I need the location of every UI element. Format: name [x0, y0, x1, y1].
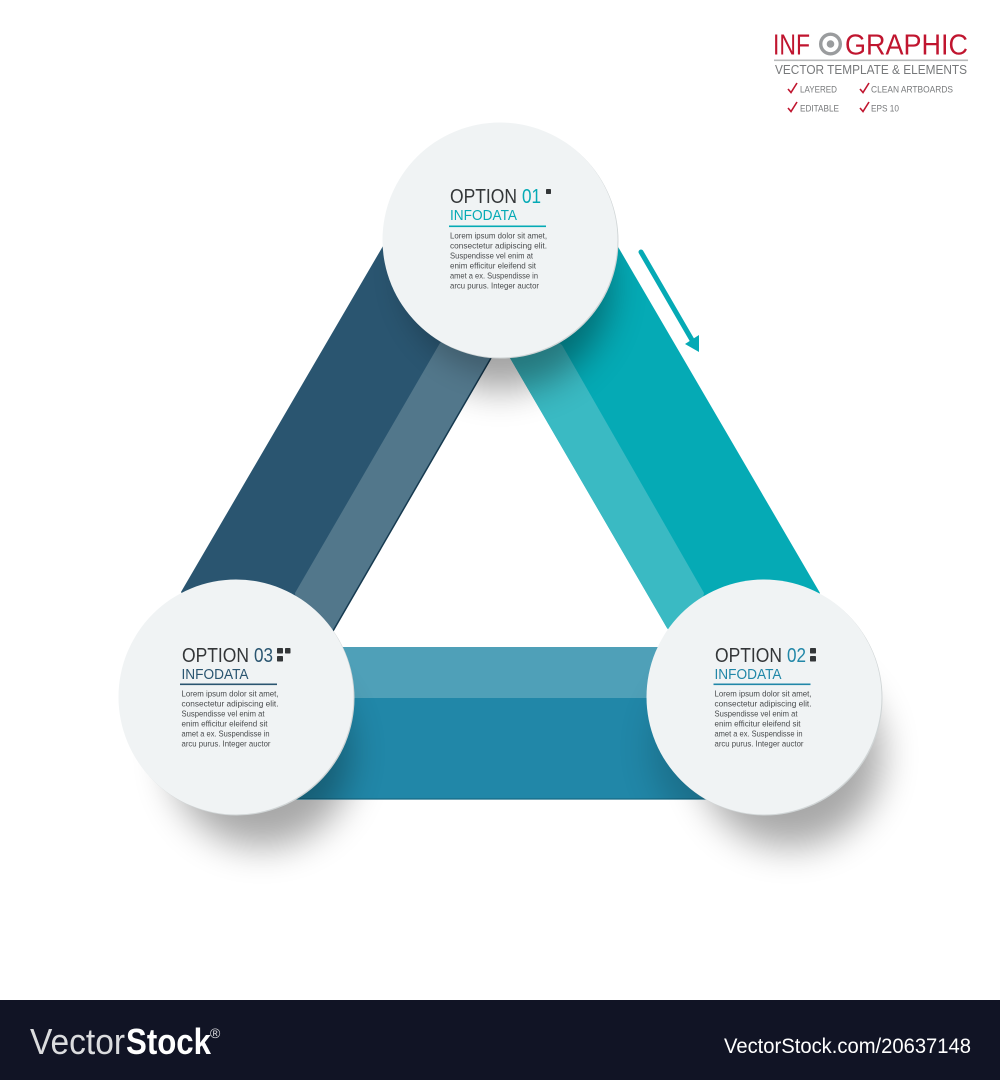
logo tagline: VECTOR TEMPLATE & ELEMENTS [775, 63, 967, 77]
underline 03 [180, 684, 277, 685]
body text 02 [714, 688, 812, 748]
band: left dark [181, 246, 492, 632]
body text 02: arcu purus. Integer auctor [714, 738, 804, 748]
footer brand: ® [210, 1025, 221, 1041]
feature list: EDITABLE [800, 104, 839, 114]
icon: three squares [277, 648, 290, 662]
panel: option 02 [646, 580, 882, 816]
logo wordmark: GRAPHIC [845, 30, 968, 62]
body text 01 [450, 230, 547, 290]
body text 01: enim efficitur eleifend sit [450, 260, 537, 270]
body text 01: amet a ex. Suspendisse in [450, 270, 538, 280]
band: right teal [510, 247, 820, 630]
footer url: VectorStock.com/20637148 [724, 1035, 971, 1058]
body text 02: enim efficitur eleifend sit [714, 718, 801, 728]
body text 03: Lorem ipsum dolor sit amet, [182, 688, 278, 698]
body text 02: Suspendisse vel enim at [714, 708, 798, 718]
footer brand [30, 1021, 221, 1062]
body text 02: amet a ex. Suspendisse in [714, 728, 803, 738]
icon: two squares [810, 648, 816, 662]
body text 01: consectetur adipiscing elit. [450, 240, 547, 250]
body text 01: arcu purus. Integer auctor [450, 280, 539, 290]
logo wordmark: INF [773, 30, 810, 62]
subheading: infodata 02: INFODATA [714, 666, 782, 683]
body text 03 [182, 688, 278, 748]
logo wordmark [773, 30, 968, 62]
footer bar [0, 1000, 1000, 1080]
logo divider [774, 60, 968, 61]
body text 03: arcu purus. Integer auctor [182, 738, 271, 748]
body text 01: Suspendisse vel enim at [450, 250, 534, 260]
body text 02: consectetur adipiscing elit. [714, 698, 812, 708]
feature list [788, 83, 953, 114]
logo: infographic template badge [773, 30, 968, 114]
underline 02 [714, 684, 810, 685]
panel: option 03 [118, 580, 354, 816]
footer brand: Stock [126, 1021, 212, 1062]
number: 01: 01 [522, 186, 541, 208]
feature list: EPS 10 [871, 104, 899, 114]
number: 02: 02 [787, 645, 806, 667]
number: 03: 03 [254, 645, 273, 667]
body text 01: Lorem ipsum dolor sit amet, [450, 230, 547, 240]
body text 03: enim efficitur eleifend sit [182, 718, 268, 728]
feature list: LAYERED [800, 84, 837, 94]
heading: option 03: OPTION [182, 645, 249, 667]
icon: one square [546, 189, 551, 194]
body text 02: Lorem ipsum dolor sit amet, [714, 688, 812, 698]
body text 03: consectetur adipiscing elit. [182, 698, 278, 708]
body text 03: Suspendisse vel enim at [182, 708, 265, 718]
subheading: infodata 01: INFODATA [450, 207, 517, 224]
underline 01 [449, 226, 546, 227]
shadow under option 01 circle [464, 358, 537, 411]
soft shadow: option 02 circle [698, 663, 882, 847]
band: bottom blue [296, 647, 706, 800]
heading: option 01: OPTION [450, 186, 517, 208]
icon: target ring [821, 34, 840, 54]
soft shadow: option 03 circle [170, 663, 354, 847]
footer brand: Vector [30, 1021, 125, 1062]
arrow: direction [641, 252, 699, 352]
body text 03: amet a ex. Suspendisse in [182, 728, 270, 738]
feature list: CLEAN ARTBOARDS [871, 84, 953, 94]
subheading: infodata 03: INFODATA [182, 666, 248, 683]
heading: option 02: OPTION [715, 645, 782, 667]
panel: option 01 [382, 122, 618, 358]
